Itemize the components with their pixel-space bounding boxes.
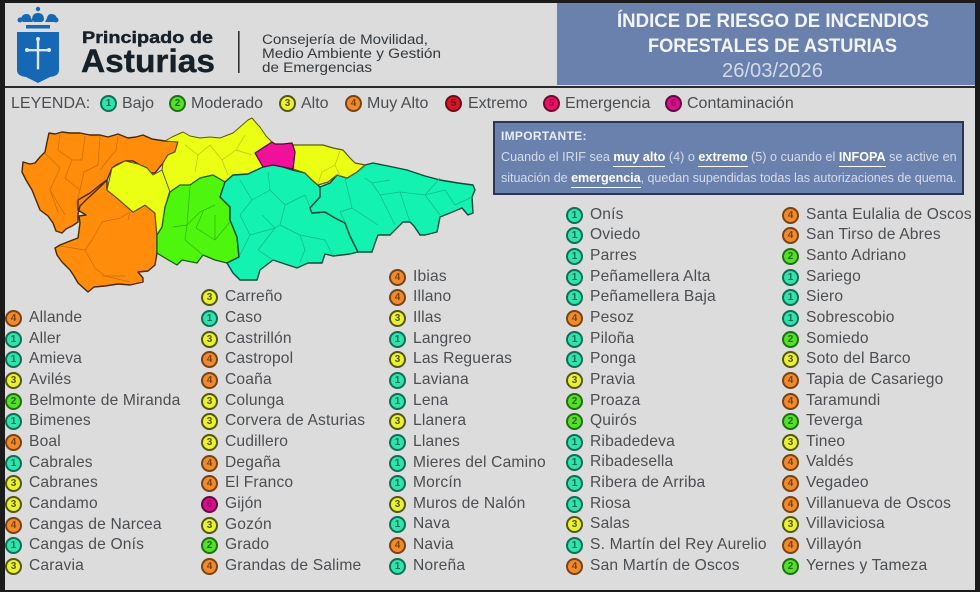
- municipality list: column 5: 2: [788, 416, 793, 427]
- department name: Consejería de Movilidad,: [262, 32, 428, 47]
- municipality list: column 2: 3: [207, 396, 212, 407]
- title text: ÍNDICE DE RIESGO DE INCENDIOS: [617, 9, 929, 32]
- municipality list: column 2: 4: [207, 561, 212, 572]
- municipality list: column 2: Grandas de Salime: [225, 557, 361, 574]
- municipality list: column 3: Illano: [413, 288, 451, 305]
- municipality list: column 2: 4: [207, 478, 212, 489]
- municipality list: column 1: 4: [11, 313, 16, 324]
- municipality list: column 5: Tineo: [806, 433, 845, 450]
- callout: important notice: Cuando el IRIF sea muy alto (4) o extremo (5) o cuando el INFOPA se active en: [501, 150, 957, 164]
- title panel: [557, 3, 975, 85]
- municipality list: column 2: Grado: [225, 536, 269, 553]
- municipality list: column 3: 3: [395, 416, 400, 427]
- municipality list: column 2: 4: [207, 458, 212, 469]
- municipality list: column 5: 3: [788, 437, 793, 448]
- municipality list: column 3: Navia: [413, 536, 454, 553]
- municipality list: column 3: Llanes: [413, 433, 460, 450]
- municipality list: column 4: 1: [572, 499, 577, 510]
- municipality list: column 2: 1: [207, 313, 212, 324]
- municipality list: column 5: Sobrescobio: [806, 309, 895, 326]
- municipality list: column 3: 3: [395, 354, 400, 365]
- municipality list: column 1: 1: [11, 334, 16, 345]
- map region: yellow high risk east: [293, 145, 365, 185]
- municipality list: column 1: 1: [11, 416, 16, 427]
- municipality list: column 1: 4: [11, 520, 16, 531]
- municipality list: column 3: 1: [395, 334, 400, 345]
- municipality list: column 5: 4: [788, 457, 793, 468]
- municipality list: column 4: 2: [572, 396, 577, 406]
- municipality list: column 3: Mieres del Camino: [413, 454, 546, 470]
- municipality list: column 1: Allande: [29, 309, 82, 326]
- callout: important notice: IMPORTANTE:: [501, 129, 587, 143]
- municipality list: column 1: Cangas de Onís: [29, 536, 144, 553]
- logo wordmark: Principado de Asturias: Principado de: [82, 29, 213, 47]
- municipality list: column 1: 1: [11, 354, 16, 365]
- municipality list: column 2: El Franco: [225, 474, 293, 491]
- legend: Extremo: [468, 95, 528, 112]
- municipality list: column 3: Noreña: [413, 557, 465, 574]
- municipality list: column 3: 1: [395, 396, 400, 407]
- municipality list: column 3: Las Regueras: [413, 350, 512, 367]
- municipality list: column 4: Ponga: [590, 350, 636, 367]
- municipality list: column 4: Onís: [590, 206, 624, 223]
- municipality list: column 3: Illas: [413, 309, 442, 326]
- municipality list: column 2: 3: [207, 292, 212, 303]
- municipality list: column 3: 1: [395, 561, 400, 572]
- municipality list: column 4: San Martín de Oscos: [590, 557, 740, 574]
- municipality list: column 1: 3: [11, 375, 16, 386]
- municipality list: column 4: Salas: [590, 515, 630, 532]
- municipality list: column 3: Ibias: [413, 268, 447, 285]
- municipality list: column 2: 3: [207, 437, 212, 448]
- municipality list: column 2: 2: [207, 540, 212, 551]
- municipality list: column 5: 1: [788, 272, 793, 283]
- municipality list: column 4: 1: [572, 478, 577, 489]
- municipality list: column 4: 2: [572, 416, 577, 427]
- municipality list: column 4: Peñamellera Alta: [590, 268, 711, 285]
- logo wordmark: Principado de Asturias: Asturias: [81, 43, 215, 79]
- municipality list: column 1: Caravia: [29, 557, 84, 574]
- legend: 5: [451, 98, 456, 109]
- municipality list: column 4: Proaza: [590, 392, 640, 408]
- municipality list: column 4: Ribadedeva: [590, 433, 675, 450]
- municipality list: column 1: 2: [11, 396, 16, 407]
- municipality list: column 1: 3: [11, 478, 16, 489]
- municipality list: column 5: Santo Adriano: [806, 247, 906, 264]
- municipality list: column 1: Cabrales: [29, 454, 93, 471]
- municipality list: column 4: Pravia: [590, 371, 635, 388]
- legend: 6: [671, 98, 676, 109]
- municipality list: column 5: Vegadeo: [806, 474, 869, 491]
- municipality list: column 1: Cangas de Narcea: [29, 516, 162, 533]
- logo wordmark: Principado de Asturias: [81, 29, 215, 79]
- municipality list: column 3: 1: [395, 458, 400, 468]
- municipality list: column 5: 4: [788, 210, 793, 221]
- municipality list: column 4: 1: [572, 292, 577, 303]
- municipality list: column 5: Yernes y Tameza: [806, 557, 927, 574]
- legend: LEYENDA:: [11, 95, 90, 112]
- municipality list: column 3: Morcín: [413, 474, 462, 491]
- logo divider: [238, 31, 240, 73]
- municipality list: column 4: 1: [572, 210, 577, 221]
- legend: [11, 95, 794, 112]
- map region: yellow high risk centre: [107, 118, 272, 235]
- municipality list: column 4: 1: [572, 272, 577, 283]
- municipality list: column 1: Candamo: [29, 495, 98, 512]
- municipality list: column 2: Coaña: [225, 371, 272, 388]
- municipality list: column 4: Piloña: [590, 330, 634, 347]
- municipality list: column 3: 1: [395, 519, 400, 530]
- municipality list: column 2: 4: [207, 354, 212, 365]
- municipality list: column 5: 3: [788, 519, 793, 530]
- municipality list: column 1: 1: [11, 540, 16, 551]
- legend: 5: [549, 98, 554, 109]
- municipality list: column 3: [389, 268, 546, 575]
- legend: Moderado: [191, 95, 263, 112]
- municipality list: column 1: [5, 309, 180, 575]
- municipality list: column 5: San Tirso de Abres: [806, 226, 941, 243]
- municipality list: column 5: Tapia de Casariego: [806, 371, 943, 388]
- municipality list: column 2: Degaña: [225, 454, 281, 471]
- legend: 2: [175, 98, 180, 109]
- map region: orange very high risk west: [22, 132, 178, 292]
- municipality list: column 5: Villaviciosa: [806, 515, 885, 532]
- municipality list: column 4: Ribadesella: [590, 453, 673, 470]
- municipality list: column 5: [782, 206, 972, 575]
- date: 26/03/2026: [722, 60, 823, 82]
- municipality list: column 3: Langreo: [413, 330, 471, 347]
- municipality list: column 5: 2: [788, 561, 793, 572]
- municipality list: column 4: [566, 206, 767, 575]
- municipality list: column 3: Muros de Nalón: [413, 495, 525, 512]
- municipality list: column 2: 3: [207, 416, 212, 427]
- municipality list: column 2: Caso: [225, 309, 262, 326]
- municipality list: column 4: 4: [572, 313, 577, 324]
- municipality list: column 1: Boal: [29, 433, 61, 450]
- municipality list: column 5: 4: [788, 478, 793, 489]
- municipality list: column 4: 3: [572, 519, 577, 530]
- municipality list: column 2: Gozón: [225, 516, 272, 533]
- municipality list: column 3: 1: [395, 478, 400, 489]
- municipality list: column 1: 3: [11, 499, 16, 510]
- municipality list: column 3: 3: [395, 313, 400, 324]
- municipality list: column 3: 4: [395, 540, 400, 551]
- municipality list: column 2: 6: [207, 499, 212, 510]
- municipality list: column 5: 2: [788, 334, 793, 345]
- map region: teal low risk east: [310, 163, 475, 252]
- municipality list: column 5: Valdés: [806, 453, 854, 470]
- municipality list: column 4: 4: [572, 561, 577, 572]
- municipality list: column 5: Villayón: [806, 536, 862, 553]
- municipality list: column 5: 4: [788, 540, 793, 551]
- municipality list: column 2: Castrillón: [225, 330, 292, 347]
- municipality list: column 5: 4: [788, 230, 793, 241]
- municipality list: column 1: Bimenes: [29, 412, 91, 429]
- municipality list: column 4: Peñamellera Baja: [590, 288, 716, 305]
- municipality list: column 4: 3: [572, 375, 577, 386]
- municipality list: column 4: S. Martín del Rey Aurelio: [590, 536, 767, 553]
- municipality list: column 4: Ribera de Arriba: [590, 474, 705, 491]
- header rule: [5, 86, 975, 88]
- legend: Alto: [301, 95, 329, 112]
- callout: important notice: [493, 121, 964, 195]
- municipality list: column 1: Avilés: [29, 371, 71, 388]
- municipality list: column 3: Nava: [413, 515, 450, 532]
- municipality list: column 3: Laviana: [413, 371, 469, 388]
- municipality list: column 5: 4: [788, 396, 793, 406]
- municipality list: column 5: 1: [788, 292, 793, 303]
- municipality list: column 3: 4: [395, 292, 400, 303]
- map region: magenta contamination Gijón: [255, 142, 295, 169]
- municipality list: column 4: 1: [572, 354, 577, 365]
- municipality list: column 4: 1: [572, 437, 577, 448]
- municipality list: column 2: [201, 288, 365, 575]
- municipality list: column 5: 1: [788, 313, 793, 324]
- department name: de Emergencias: [262, 60, 372, 75]
- municipality list: column 5: 4: [788, 375, 793, 386]
- callout: important notice: situación de emergencia, quedan supendidas todas las autorizaciones de quema.: [501, 171, 956, 185]
- municipality list: column 1: 3: [11, 561, 16, 572]
- municipality list: column 5: 3: [788, 354, 793, 365]
- map region: green moderate risk: [157, 175, 239, 265]
- municipality list: column 4: 1: [572, 457, 577, 468]
- department name: [262, 32, 441, 75]
- municipality list: column 2: Colunga: [225, 392, 284, 409]
- municipality list: column 2: 3: [207, 334, 212, 345]
- municipality list: column 4: Quirós: [590, 412, 637, 429]
- legend: Bajo: [122, 95, 154, 112]
- municipality list: column 2: Carreño: [225, 288, 283, 305]
- municipality list: column 2: Castropol: [225, 350, 293, 367]
- municipality list: column 1: 4: [11, 437, 16, 448]
- title text: FORESTALES DE ASTURIAS: [648, 35, 897, 57]
- municipality list: column 2: Cudillero: [225, 433, 288, 450]
- department name: Medio Ambiente y Gestión: [262, 46, 441, 61]
- municipality list: column 2: 3: [207, 520, 212, 531]
- municipality list: column 5: 4: [788, 499, 793, 510]
- legend: Emergencia: [565, 95, 650, 112]
- municipality list: column 5: Teverga: [806, 412, 863, 429]
- legend: 3: [285, 98, 290, 109]
- municipality list: column 3: 4: [395, 272, 400, 283]
- header: government logo block: [17, 6, 441, 83]
- municipality list: column 5: Taramundi: [806, 392, 880, 408]
- title text: [617, 9, 929, 57]
- municipality list: column 1: 1: [11, 458, 16, 469]
- legend: Contaminación: [687, 95, 794, 112]
- municipality list: column 1: Aller: [29, 330, 61, 347]
- municipality list: column 1: Belmonte de Miranda: [29, 392, 180, 409]
- municipality list: column 4: 1: [572, 230, 577, 241]
- municipality list: column 4: 1: [572, 334, 577, 345]
- municipality list: column 1: Amieva: [29, 350, 82, 367]
- icon: shield with crown and cross: [17, 7, 59, 83]
- municipality list: column 5: Sariego: [806, 268, 861, 285]
- map of Asturias by risk level: [21, 118, 476, 293]
- map region: teal low risk west: [220, 165, 358, 280]
- municipality list: column 5: Villanueva de Oscos: [806, 495, 951, 512]
- legend: 1: [106, 98, 111, 109]
- municipality list: column 4: 1: [572, 540, 577, 551]
- municipality list: column 3: 1: [395, 437, 400, 448]
- municipality list: column 4: Parres: [590, 247, 637, 264]
- municipality list: column 3: 3: [395, 499, 400, 510]
- municipality list: column 5: 2: [788, 251, 793, 262]
- municipality list: column 4: Pesoz: [590, 309, 634, 326]
- municipality list: column 2: 4: [207, 375, 212, 386]
- municipality list: column 2: Corvera de Asturias: [225, 412, 365, 429]
- municipality list: column 4: Oviedo: [590, 226, 640, 243]
- municipality list: column 1: Cabranes: [29, 474, 98, 491]
- municipality list: column 3: Llanera: [413, 412, 466, 429]
- legend: Muy Alto: [367, 95, 428, 112]
- municipality list: column 3: 1: [395, 375, 400, 386]
- municipality list: column 5: Santa Eulalia de Oscos: [806, 206, 972, 223]
- municipality list: column 2: Gijón: [225, 495, 262, 512]
- municipality list: column 4: Riosa: [590, 495, 631, 512]
- legend: 4: [351, 98, 356, 109]
- municipality list: column 3: Lena: [413, 392, 448, 409]
- municipality list: column 5: Siero: [806, 288, 843, 305]
- municipality list: column 5: Soto del Barco: [806, 350, 911, 367]
- municipality list: column 4: 1: [572, 251, 577, 262]
- municipality list: column 5: Somiedo: [806, 330, 869, 347]
